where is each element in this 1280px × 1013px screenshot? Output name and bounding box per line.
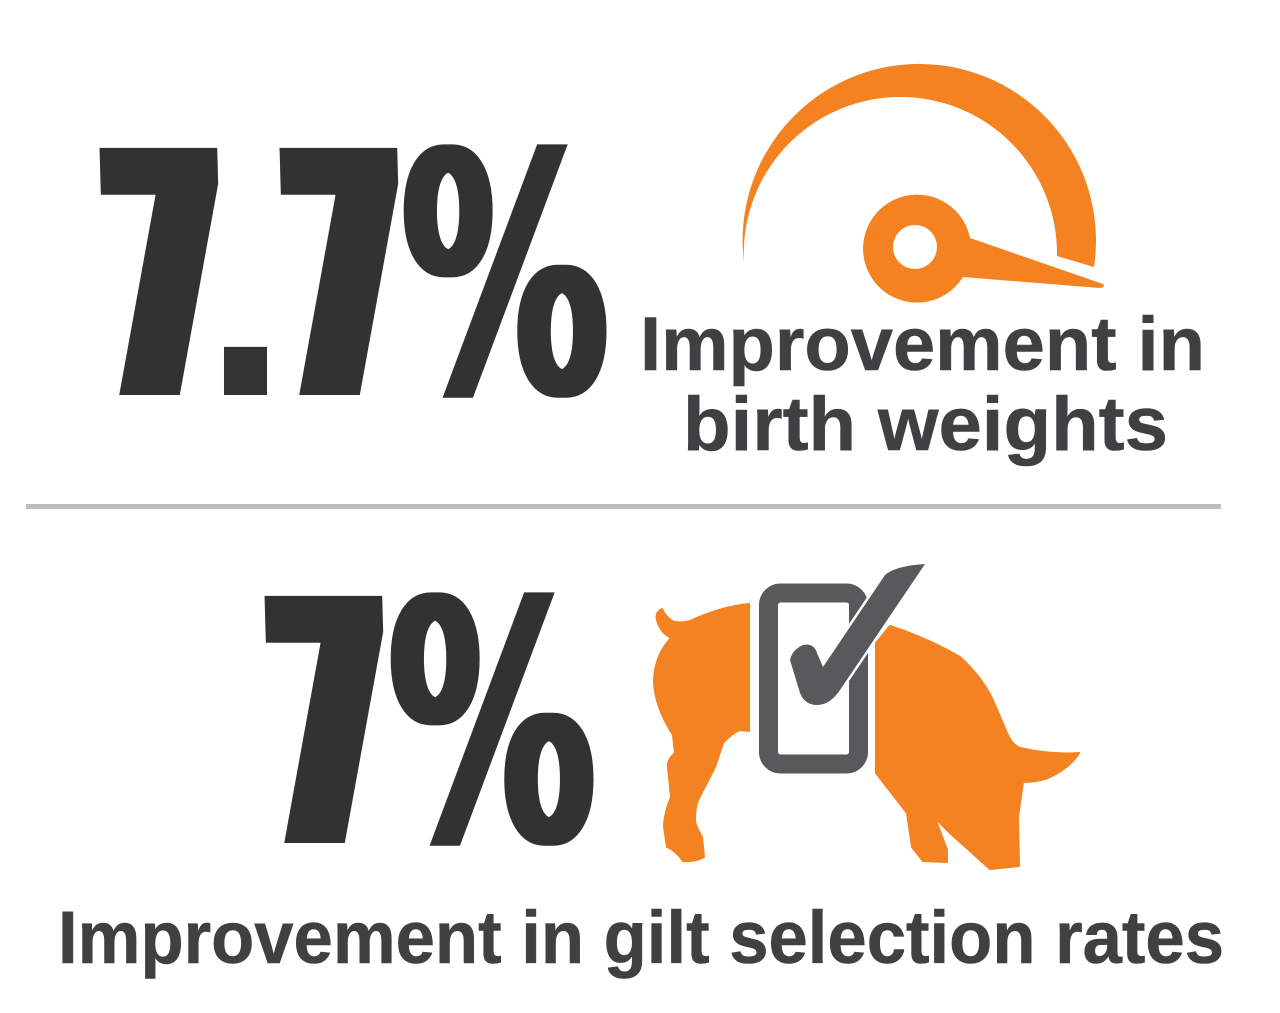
stat number: 7.7%: .	[199, 158, 292, 455]
icon: speedometer gauge	[743, 64, 1104, 303]
stat number: 7.7%	[103, 82, 609, 476]
checkbox	[768, 593, 858, 764]
stat number: 7.7%: 7	[283, 82, 403, 476]
pig rear section	[654, 604, 749, 861]
stat number: 7%	[268, 530, 596, 924]
stat number: 7%: %	[388, 530, 596, 920]
label: Improvement in birth weights	[640, 302, 1205, 467]
stat number: 7.7%: 7	[103, 82, 223, 476]
label: Improvement in gilt selection rates: Improvement in gilt selection rates	[58, 896, 1224, 979]
panel: gilt selection statistic	[58, 530, 1224, 979]
label: Improvement in birth weights: Improvement in	[640, 302, 1205, 387]
panel: birth weights statistic	[103, 64, 1205, 476]
pig front section	[876, 626, 1079, 869]
label: Improvement in birth weights: birth weights	[683, 382, 1168, 467]
stat number: 7.7%: %	[401, 82, 609, 472]
stat number: 7%: 7	[268, 530, 388, 924]
icon: pig with checkbox	[654, 564, 1079, 869]
check mark	[790, 564, 925, 705]
